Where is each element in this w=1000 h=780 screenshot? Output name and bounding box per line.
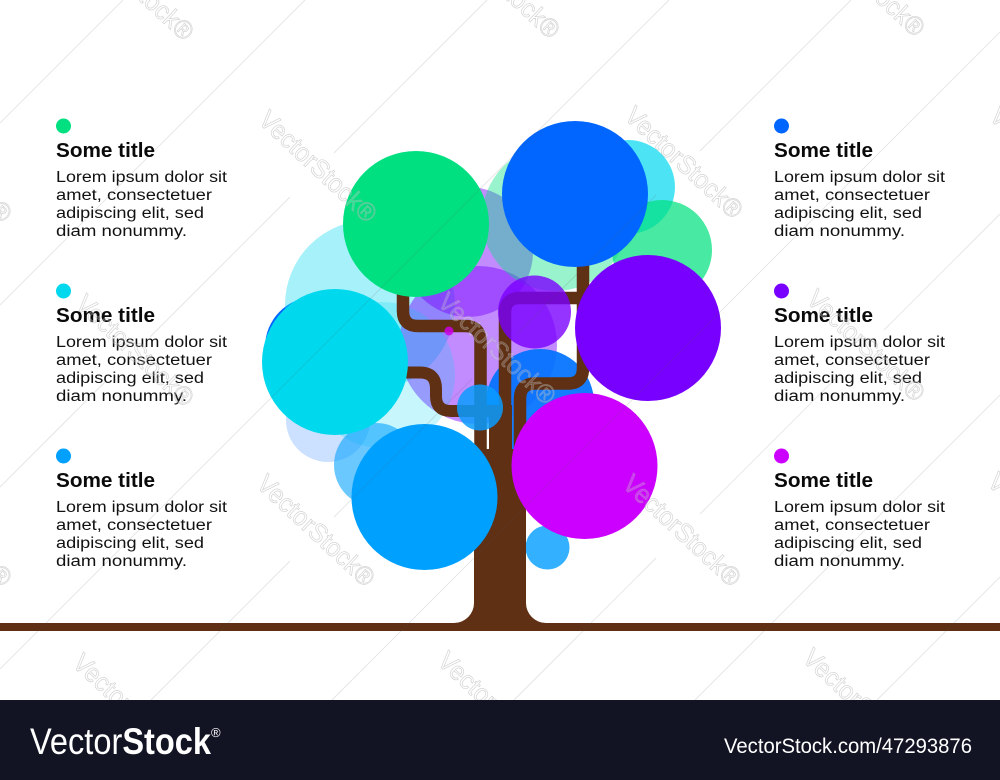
watermark overlay: VectorStock® <box>432 286 562 411</box>
body: Lorem ipsum dolor sit <box>774 169 946 186</box>
heading: Some title <box>774 470 873 492</box>
main circle: violet <box>575 255 721 401</box>
heading: Some title <box>56 305 155 327</box>
tree trunk and ground <box>0 255 1000 631</box>
tree illustration <box>0 121 1000 631</box>
watermark overlay: VectorStock® <box>619 100 749 225</box>
body: adipiscing elit, sed <box>774 535 922 552</box>
dot <box>774 118 789 134</box>
text block: magenta <box>774 448 946 570</box>
body <box>56 499 228 570</box>
body: diam nonummy. <box>774 388 905 405</box>
main circle: sky blue <box>352 424 498 570</box>
body: Lorem ipsum dolor sit <box>774 334 946 351</box>
translucent sky foliage circle <box>334 423 418 507</box>
light cyan foliage circle <box>285 220 455 390</box>
body: diam nonummy. <box>56 388 187 405</box>
body: adipiscing elit, sed <box>56 370 204 387</box>
body <box>56 169 228 240</box>
branch: right <box>520 255 583 450</box>
body: adipiscing elit, sed <box>56 205 204 222</box>
light green foliage circle <box>482 145 628 291</box>
branch: left upper <box>403 270 480 450</box>
pale cyan foliage circle lower <box>309 302 455 448</box>
footer logo: VectorStock <box>30 721 211 762</box>
body: amet, consectetuer <box>774 187 930 204</box>
body: Lorem ipsum dolor sit <box>56 499 228 516</box>
watermark overlay: VectorStock® <box>251 468 381 593</box>
blue foliage sliver <box>265 297 365 397</box>
pale blue foliage circle <box>286 378 370 462</box>
body <box>774 334 946 405</box>
body: amet, consectetuer <box>56 352 212 369</box>
watermark overlay: VectorStock® <box>253 104 383 229</box>
footer url: VectorStock.com/47293876 <box>724 735 972 758</box>
main circle: green <box>343 151 489 297</box>
translucent cyan foliage circle <box>581 140 675 234</box>
heading: Some title <box>56 470 155 492</box>
medium blue foliage circle <box>486 349 594 457</box>
dot <box>774 448 789 464</box>
main circle: blue <box>502 121 648 267</box>
dot <box>56 448 71 464</box>
footer registered mark: ® <box>211 725 221 740</box>
light purple foliage circle upper <box>403 187 533 317</box>
dot <box>56 118 71 134</box>
ground line <box>0 623 1000 631</box>
trunk center block <box>489 405 512 451</box>
watermark overlay: VectorStock® <box>801 283 931 408</box>
small sky foliage circle <box>526 526 570 570</box>
main circle: cyan <box>262 289 408 435</box>
text block: blue <box>774 118 946 240</box>
text block: green <box>56 118 228 240</box>
body: Lorem ipsum dolor sit <box>56 169 228 186</box>
branch: left lower <box>395 372 500 411</box>
translucent green foliage circle <box>612 200 712 300</box>
body: amet, consectetuer <box>56 517 212 534</box>
body: diam nonummy. <box>774 223 905 240</box>
text block: violet <box>774 284 946 405</box>
body: diam nonummy. <box>56 223 187 240</box>
trunk base <box>454 449 546 631</box>
body: amet, consectetuer <box>774 352 930 369</box>
text block: cyan <box>56 284 228 405</box>
watermark overlay: VectorStock® <box>797 642 927 767</box>
heading: Some title <box>774 305 873 327</box>
dot <box>56 284 71 298</box>
body: diam nonummy. <box>56 553 187 570</box>
main circle: magenta <box>512 393 658 539</box>
body: adipiscing elit, sed <box>774 205 922 222</box>
watermark overlay: VectorStock® <box>70 288 200 413</box>
watermark overlay: VectorStock® <box>617 468 747 593</box>
body: Lorem ipsum dolor sit <box>774 499 946 516</box>
branch: center <box>505 298 583 450</box>
body <box>56 334 228 405</box>
heading: Some title <box>56 140 155 162</box>
body: adipiscing elit, sed <box>56 535 204 552</box>
body: adipiscing elit, sed <box>774 370 922 387</box>
body: Lorem ipsum dolor sit <box>56 334 228 351</box>
light purple foliage circle lower <box>399 266 557 424</box>
body: amet, consectetuer <box>774 517 930 534</box>
body <box>774 169 946 240</box>
body <box>774 499 946 570</box>
dot <box>774 284 789 298</box>
small purple circle <box>498 276 571 348</box>
small blue circle on trunk <box>457 384 503 430</box>
footer bar <box>0 700 1000 780</box>
text block: sky blue <box>56 448 228 570</box>
body: diam nonummy. <box>774 553 905 570</box>
body: amet, consectetuer <box>56 187 212 204</box>
heading: Some title <box>774 140 873 162</box>
magenta small dot <box>444 326 454 336</box>
watermark overlay: VectorStock® <box>67 647 197 772</box>
watermark overlay: VectorStock® <box>432 645 562 770</box>
